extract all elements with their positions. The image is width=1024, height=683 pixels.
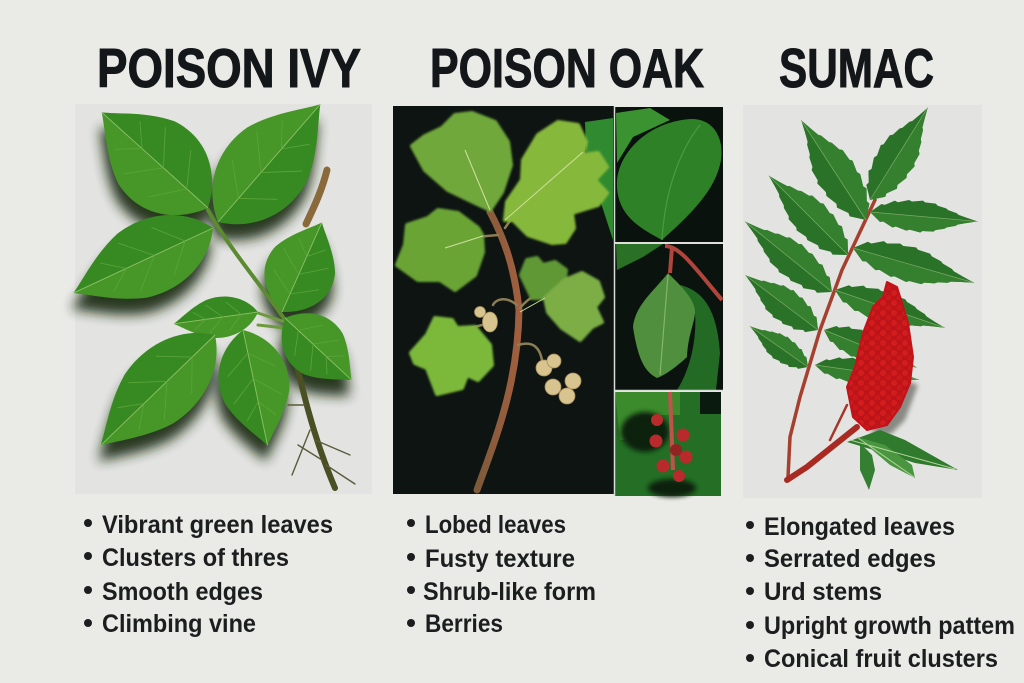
title: poison ivy: POISON IVY — [97, 37, 361, 99]
fruit shadow — [870, 380, 918, 435]
panel: oak inset stem and leaf — [615, 244, 723, 390]
bullet list: sumac — [746, 513, 1015, 673]
lobed leaves — [397, 113, 607, 394]
bottom leaves — [847, 430, 958, 490]
bullet list: poison ivy: Vibrant green leaves — [102, 511, 333, 539]
sumac leaflets — [734, 97, 979, 392]
bullet list: poison oak: Lobed leaves — [425, 511, 566, 539]
bullet list: poison oak: Shrub-like form — [423, 578, 596, 606]
oak stems — [463, 212, 548, 490]
bullet list: poison ivy: Clusters of thres — [102, 544, 289, 572]
leaf shadows — [56, 92, 370, 488]
background leaf — [585, 118, 613, 240]
ivy leaves — [58, 76, 372, 472]
panel: oak inset red berries — [615, 392, 721, 497]
bullet list: poison oak: Berries — [425, 610, 503, 638]
ivy stems — [208, 170, 355, 488]
bullet list: poison ivy — [84, 511, 333, 638]
midribs — [445, 150, 583, 312]
bullet list: poison ivy: Climbing vine — [102, 610, 256, 638]
sumac red fruit cluster — [847, 282, 913, 430]
title: sumac: SUMAC — [779, 37, 934, 99]
berries — [474, 306, 581, 404]
title: poison oak: POISON OAK — [430, 37, 704, 99]
bullet list: sumac: Upright growth pattem — [764, 612, 1015, 640]
sumac stems — [787, 200, 875, 480]
panel: poison oak main photo — [393, 106, 615, 494]
bullet list: poison oak — [407, 511, 596, 638]
bullet list: sumac: Urd stems — [764, 578, 882, 606]
bullet list: sumac: Serrated edges — [764, 545, 936, 573]
panel: oak inset leaf — [615, 107, 723, 242]
inset divider lines — [614, 106, 723, 496]
panel: sumac photo — [734, 97, 982, 498]
panel: poison ivy photo — [56, 76, 372, 494]
bullet list: poison oak: Fusty texture — [425, 545, 575, 573]
bullet list: poison ivy: Smooth edges — [102, 578, 263, 606]
bullet list: sumac: Elongated leaves — [764, 513, 955, 541]
bullet list: sumac: Conical fruit clusters — [764, 645, 998, 673]
